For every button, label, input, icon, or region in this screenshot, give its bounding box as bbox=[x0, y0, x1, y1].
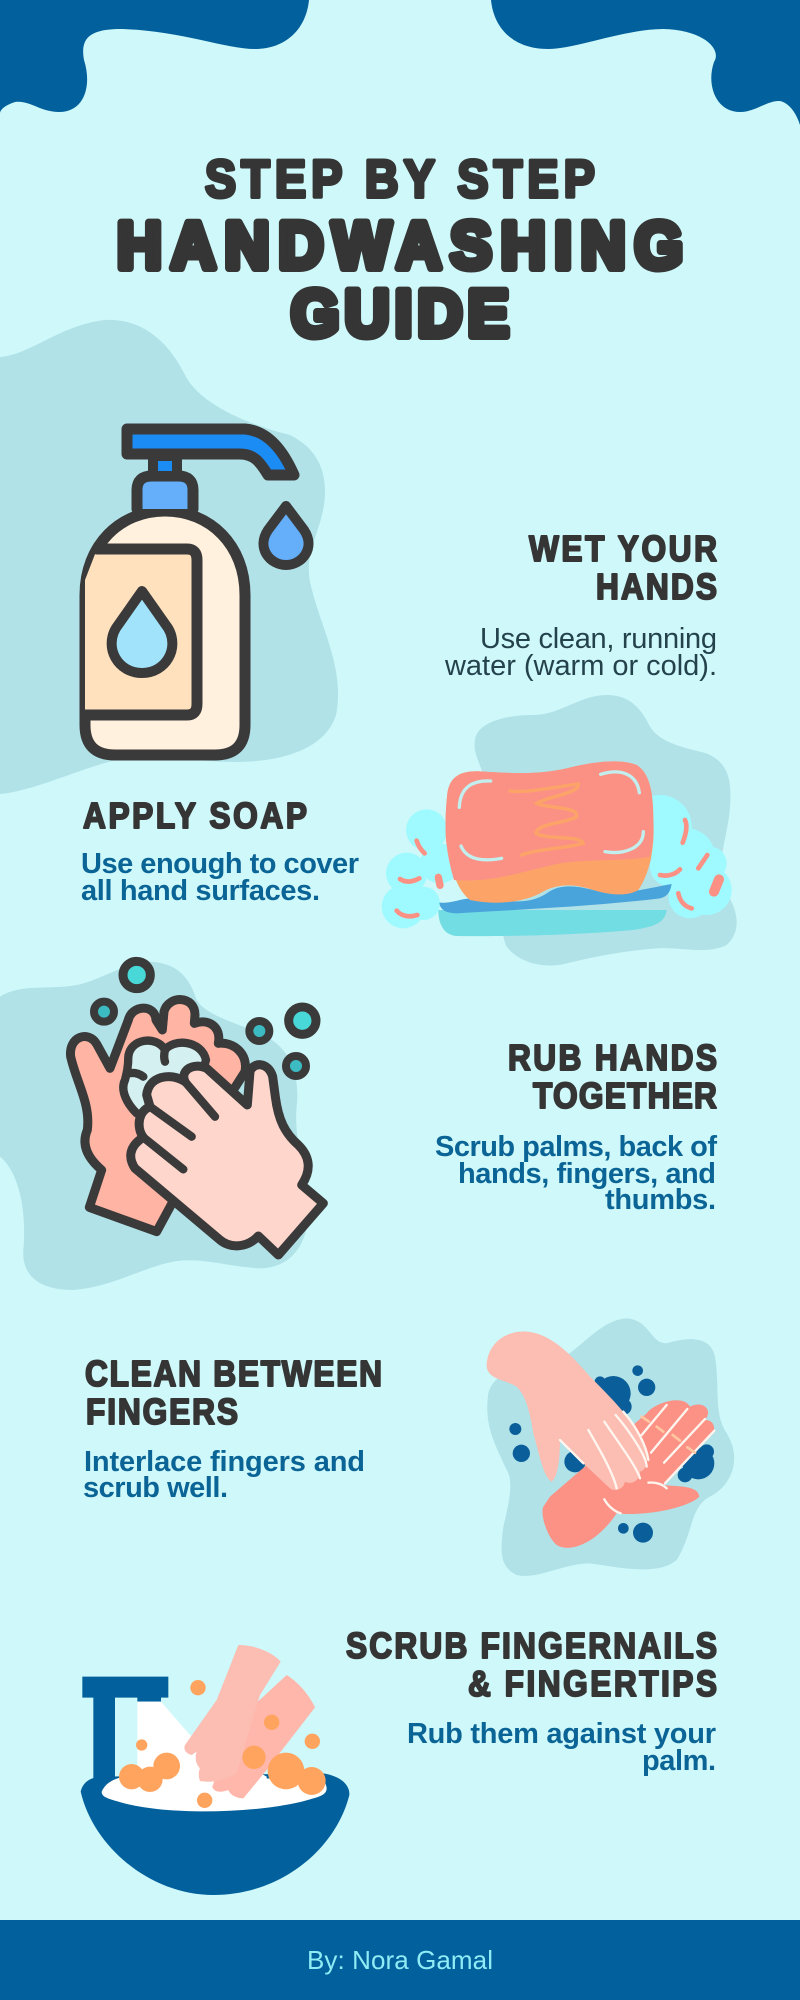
back hand bbox=[212, 1675, 315, 1798]
icon: interlaced hands bbox=[487, 1318, 734, 1576]
panel: scrub fingernails text bbox=[346, 1626, 717, 1777]
text: clean between fingers description: Interlace fingers and bbox=[84, 1446, 365, 1478]
text: scrub fingernails description: palm. bbox=[642, 1745, 716, 1777]
title: STEP BY STEP bbox=[205, 149, 595, 209]
panel: wet your hands text bbox=[444, 529, 717, 682]
text: rub hands description: Scrub palms, back of bbox=[435, 1131, 717, 1163]
text: rub hands description: thumbs. bbox=[605, 1184, 716, 1216]
heading: rub hands together: TOGETHER bbox=[533, 1076, 717, 1116]
bowl bbox=[81, 1773, 349, 1895]
heading: apply soap: APPLY SOAP bbox=[83, 796, 307, 836]
heading: rub hands together: RUB HANDS bbox=[508, 1038, 717, 1078]
title: HANDWASHING bbox=[117, 208, 683, 282]
water stream bbox=[137, 1702, 267, 1787]
panel: rub hands text bbox=[435, 1038, 717, 1216]
top right wave corner bbox=[491, 0, 800, 125]
heading: wet your hands bbox=[529, 529, 717, 607]
front hand bbox=[131, 1065, 323, 1255]
heading: clean between fingers: FINGERS bbox=[86, 1392, 238, 1432]
icon: washing hands in basin bbox=[81, 1645, 349, 1895]
heading: clean between fingers bbox=[85, 1354, 382, 1432]
panel: clean between fingers text bbox=[83, 1354, 382, 1504]
blob background bbox=[0, 962, 308, 1290]
footer bar bbox=[0, 1920, 800, 2000]
text: wet your hands description bbox=[444, 623, 717, 682]
heading: wet your hands: HANDS bbox=[596, 567, 717, 607]
faucet bbox=[82, 1677, 168, 1783]
blob background bbox=[487, 1318, 734, 1576]
text: wet your hands description: water (warm or cold). bbox=[444, 650, 717, 682]
foam bbox=[123, 1041, 206, 1127]
text: scrub fingernails description: Rub them against your bbox=[407, 1718, 716, 1750]
heading: wet your hands: WET YOUR bbox=[529, 529, 717, 569]
front hand bbox=[184, 1645, 281, 1782]
icon: hands rubbing with foam bbox=[0, 961, 323, 1290]
bubbles bbox=[94, 961, 316, 1076]
water surface bbox=[102, 1775, 327, 1811]
top left wave corner bbox=[0, 0, 309, 113]
heading: rub hands together bbox=[508, 1038, 717, 1116]
back hand bbox=[70, 1000, 245, 1232]
dish bbox=[438, 910, 667, 936]
text: apply soap description: all hand surfaces. bbox=[81, 875, 320, 907]
heading: scrub fingernails and fingertips bbox=[346, 1626, 717, 1704]
icon: soap bar on dish bbox=[382, 695, 737, 965]
text: clean between fingers description bbox=[83, 1446, 365, 1504]
heading: scrub fingernails and fingertips: & FINGERTIPS bbox=[468, 1664, 717, 1704]
heading: scrub fingernails and fingertips: SCRUB FINGERNAILS bbox=[346, 1626, 717, 1666]
panel: apply soap bbox=[0, 320, 359, 907]
icon: soap pump bottle bbox=[85, 429, 309, 755]
footer credit: By: Nora Gamal bbox=[307, 1945, 493, 1975]
foam dots bbox=[509, 1365, 714, 1543]
text: clean between fingers description: scrub well. bbox=[83, 1472, 228, 1504]
soap bar bbox=[446, 761, 654, 903]
orange foam bubbles bbox=[119, 1680, 326, 1808]
finger lines bbox=[560, 1405, 714, 1513]
foam bbox=[382, 795, 732, 928]
heading: clean between fingers: CLEAN BETWEEN bbox=[85, 1354, 382, 1394]
blob background bbox=[0, 320, 338, 794]
text: wet your hands description: Use clean, running bbox=[480, 623, 717, 655]
text: rub hands description: hands, fingers, and bbox=[458, 1158, 716, 1190]
text: rub hands description bbox=[435, 1131, 717, 1216]
text: apply soap description bbox=[81, 848, 359, 907]
lower hand bbox=[542, 1400, 714, 1548]
title: GUIDE bbox=[291, 276, 509, 350]
text: scrub fingernails description bbox=[407, 1718, 716, 1777]
blob background bbox=[475, 695, 737, 965]
text: apply soap description: Use enough to cover bbox=[81, 848, 359, 880]
foam dashes bbox=[397, 820, 719, 916]
title bbox=[117, 149, 683, 350]
upper hand bbox=[487, 1332, 647, 1490]
